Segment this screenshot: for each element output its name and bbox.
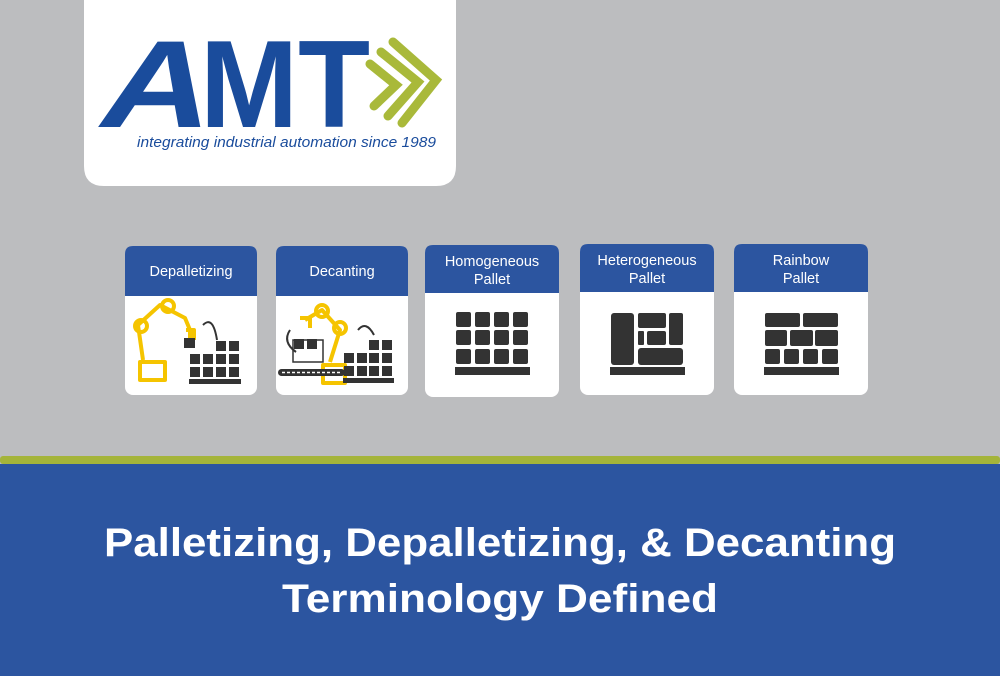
title banner bbox=[0, 464, 1000, 676]
card: Decanting: Decanting bbox=[309, 264, 375, 280]
card: Rainbow Pallet: Pallet bbox=[783, 271, 819, 287]
logo wordmark AMT: MT bbox=[200, 16, 370, 154]
logo wordmark AMT bbox=[88, 15, 370, 154]
icon: heterogeneous pallet bbox=[610, 313, 685, 375]
card: Depalletizing: Depalletizing bbox=[149, 264, 233, 280]
icon: rainbow pallet bbox=[764, 313, 839, 375]
card: Heterogeneous Pallet: Heterogeneous bbox=[597, 253, 697, 269]
card: Depalletizing bbox=[125, 246, 257, 395]
icon: robot arm depalletizing bbox=[135, 300, 241, 384]
icon: robot arm decanting bbox=[278, 305, 394, 383]
icon: homogeneous pallet bbox=[455, 312, 530, 375]
logo chevrons bbox=[370, 42, 436, 123]
logo tagline: integrating industrial automation since 1989 bbox=[137, 135, 436, 151]
green divider bar bbox=[0, 456, 1000, 464]
card: Decanting bbox=[276, 246, 408, 395]
card: Rainbow Pallet: Rainbow bbox=[773, 253, 830, 269]
card: Rainbow Pallet bbox=[734, 244, 868, 395]
card: Homogeneous Pallet: Pallet bbox=[474, 272, 510, 288]
card: Homogeneous Pallet: Homogeneous bbox=[445, 254, 539, 270]
logo panel bbox=[84, 0, 456, 186]
card: Heterogeneous Pallet: Pallet bbox=[629, 271, 665, 287]
card: Heterogeneous Pallet bbox=[580, 244, 714, 395]
title banner: Terminology Defined bbox=[282, 577, 718, 621]
card: Homogeneous Pallet bbox=[425, 245, 559, 397]
logo wordmark AMT: A bbox=[88, 15, 232, 154]
title banner: Palletizing, Depalletizing, & Decanting bbox=[104, 521, 896, 565]
